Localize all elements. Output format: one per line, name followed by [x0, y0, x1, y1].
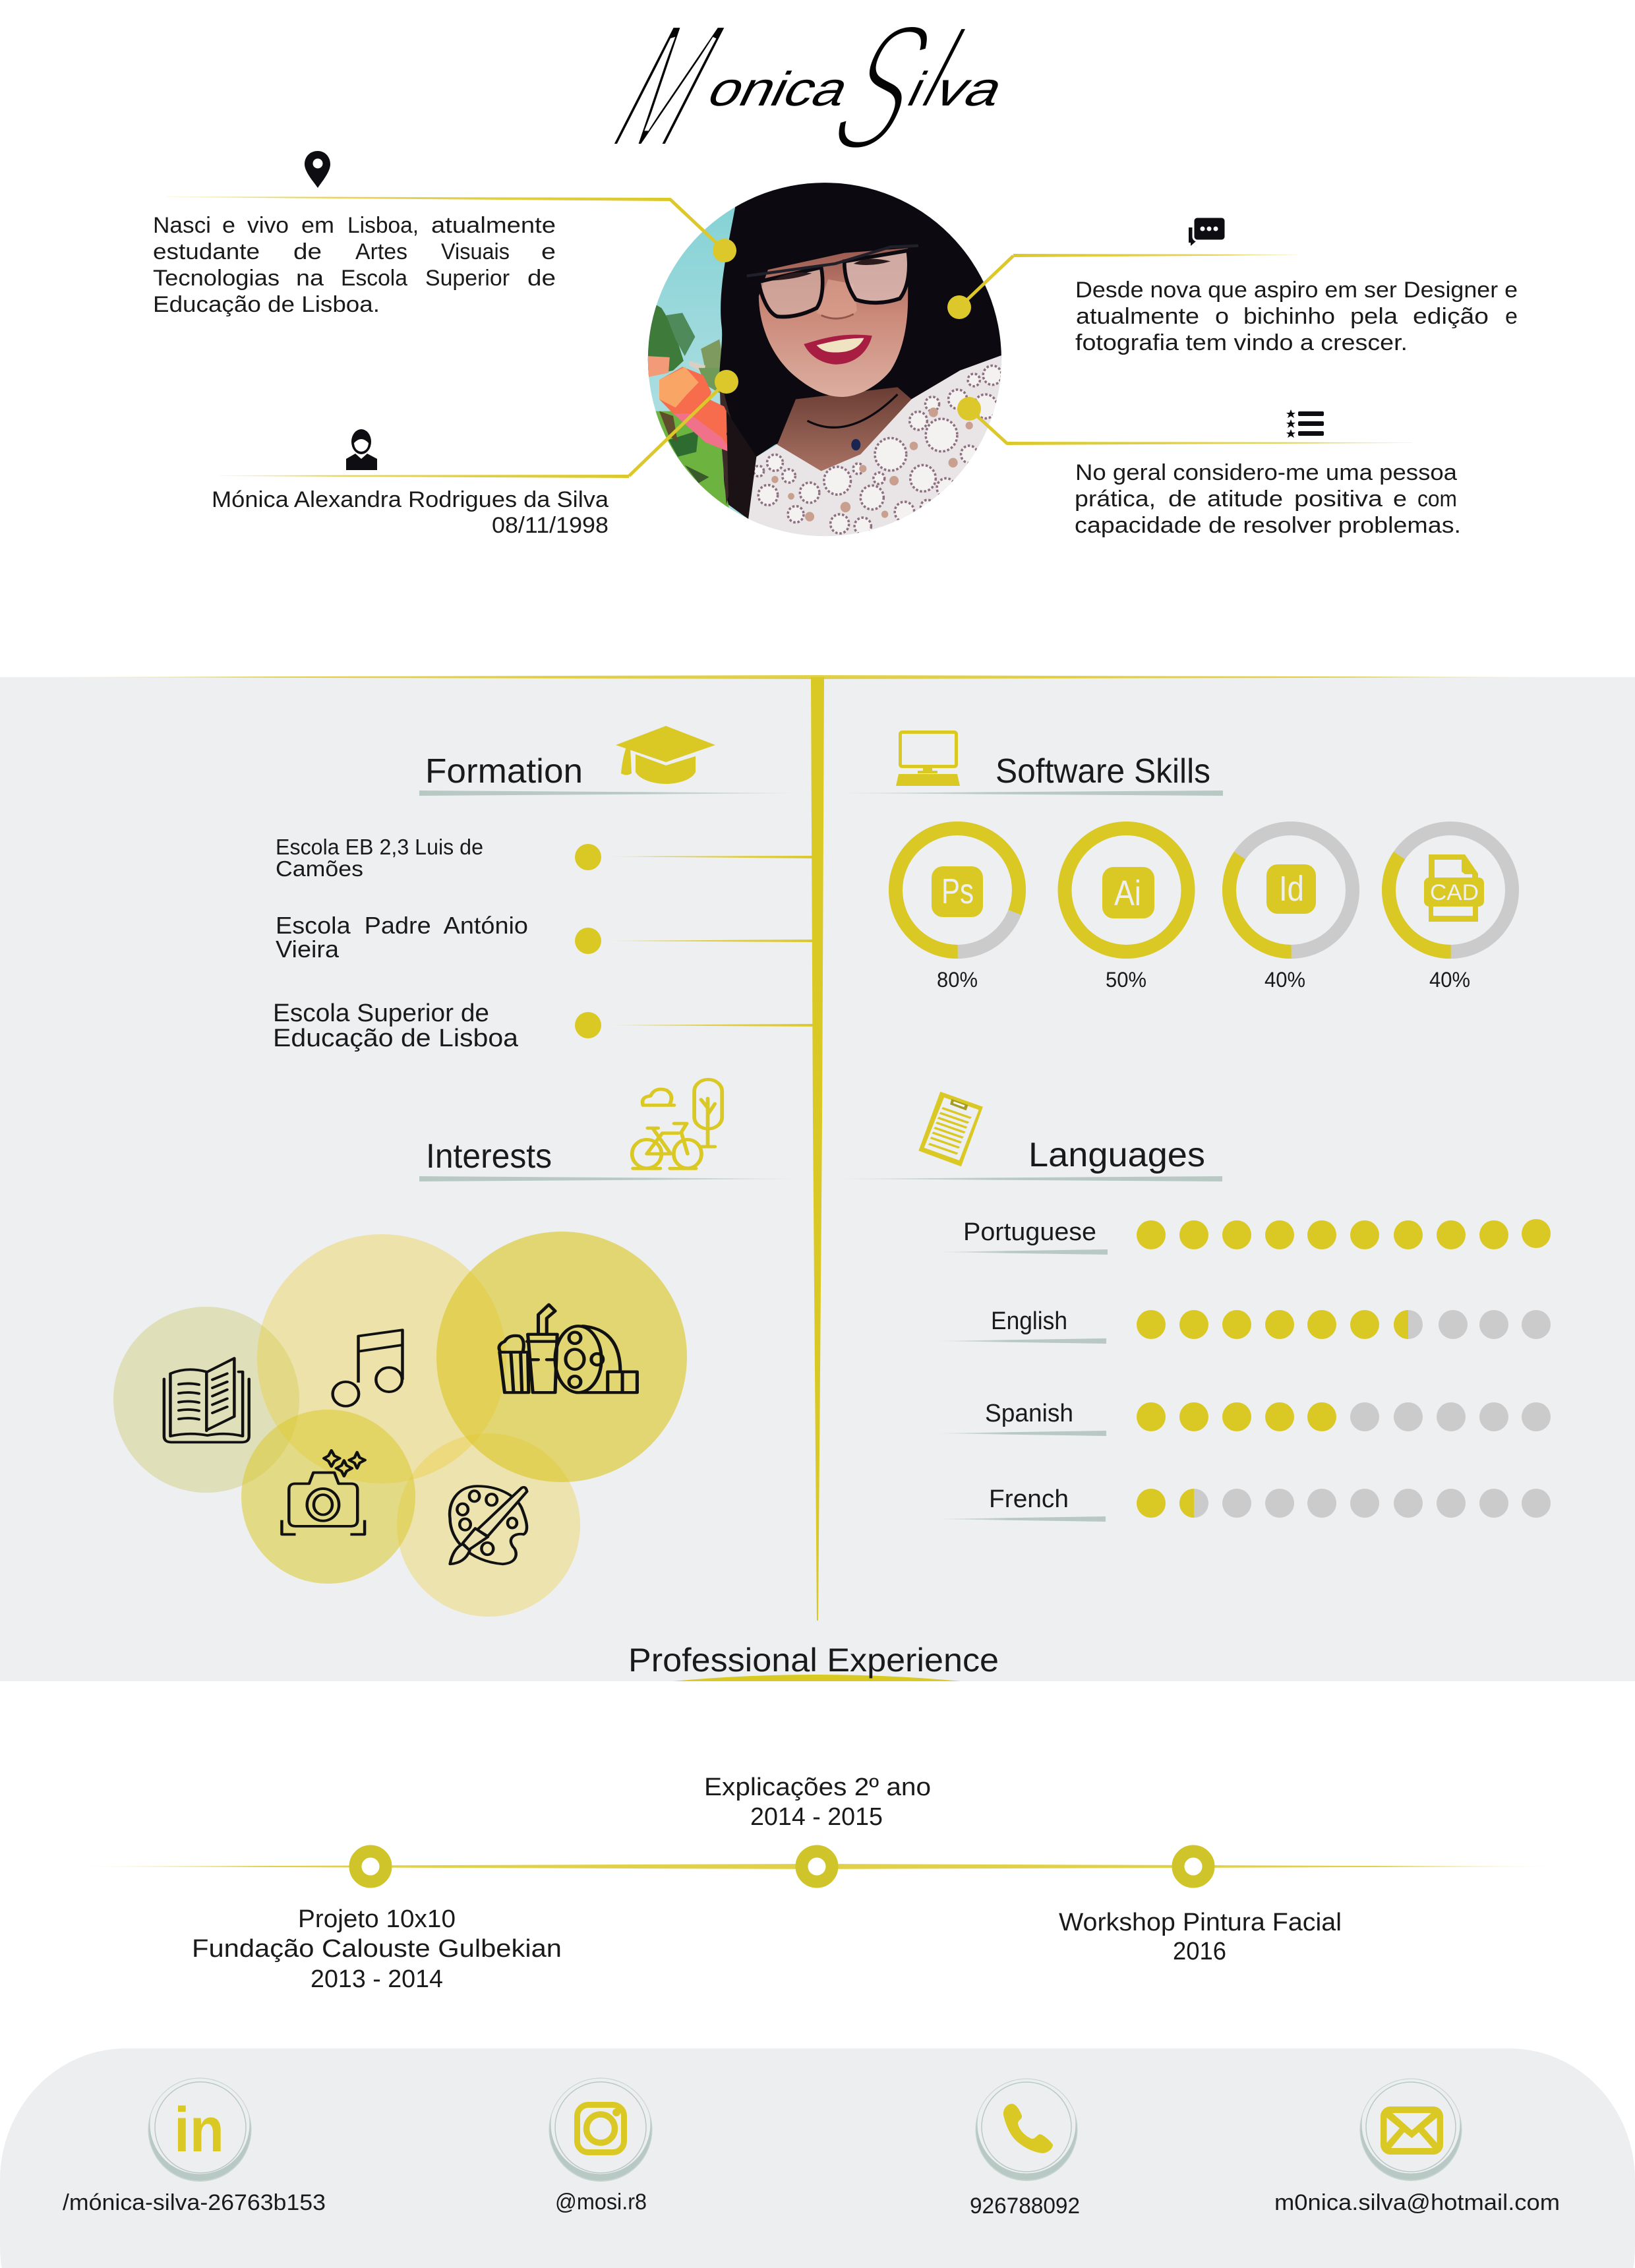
- contact: email: [1274, 2075, 1560, 2215]
- contact: phone: 926788092: [970, 2193, 1080, 2219]
- contact: LinkedIn: in: [174, 2095, 224, 2165]
- contact: phone: [970, 2075, 1080, 2219]
- title: [583, 0, 1014, 189]
- text: personality: capacidade de resolver problemas.: [1075, 513, 1461, 538]
- formation item 3: Educação de Lisboa: [273, 1025, 519, 1052]
- icon: clipboard document: [918, 1092, 983, 1166]
- text: about: e: [541, 239, 556, 264]
- connector: name line: [220, 370, 738, 478]
- title: l: [908, 10, 978, 128]
- text: about: Visuais: [441, 239, 510, 264]
- text: name and birth date: Mónica Alexandra Rodrigues da Silva: [212, 487, 609, 512]
- chart: Spanish rating: Spanish: [985, 1400, 1073, 1427]
- text: about: vivo: [247, 213, 289, 238]
- chart: CAD ring: 40%: [1429, 968, 1470, 992]
- text: aspirations: edição: [1413, 304, 1489, 329]
- formation item 1: [276, 835, 813, 881]
- connector: about line: [167, 196, 736, 262]
- text: personality: [1075, 460, 1461, 538]
- heading: Interests: [419, 1137, 798, 1181]
- chart: Illustrator ring: [1065, 828, 1188, 992]
- icon: list: [1286, 409, 1324, 438]
- timeline marker 2: [802, 1851, 832, 1882]
- icon: palette: [450, 1486, 527, 1564]
- connector: personality line: [957, 397, 1412, 445]
- timeline marker 1: [355, 1851, 386, 1882]
- list: formation: [273, 835, 813, 1052]
- text: Projeto 10x10: Fundação Calouste Gulbekian: [192, 1935, 562, 1963]
- chart: Portuguese rating: [938, 1218, 1551, 1255]
- text: Projeto 10x10: 2013 - 2014: [311, 1965, 443, 1993]
- connector: dream line: [947, 254, 1297, 319]
- icon: graduation cap: [616, 726, 715, 784]
- text: about: na: [296, 266, 324, 291]
- heading: Software Skills: Software Skills: [996, 752, 1210, 791]
- heading: Software Skills: [831, 752, 1223, 796]
- heading: Formation: Formation: [425, 752, 583, 791]
- heading: Interests: Interests: [426, 1137, 552, 1176]
- icon: speech bubbles: [1189, 217, 1226, 246]
- heading: Professional Experience: Professional Experience: [628, 1642, 999, 1679]
- formation item 3: Escola Superior de: [273, 1000, 489, 1027]
- text: aspirations: o: [1215, 304, 1229, 329]
- timeline marker 3: [1178, 1851, 1208, 1882]
- text: Projeto 10x10: [192, 1905, 562, 1993]
- formation item 3: [273, 1000, 813, 1052]
- chart: French rating: French: [989, 1485, 1069, 1513]
- text: Explicações: [704, 1774, 931, 1831]
- divider: vertical gold bar: [811, 677, 824, 1621]
- contact: Instagram: @mosi.r8: [555, 2190, 647, 2215]
- text: personality: de: [1168, 487, 1197, 512]
- chart: Photoshop ring: 80%: [937, 968, 978, 992]
- icon: camera: [282, 1450, 365, 1534]
- text: personality: e: [1393, 487, 1407, 512]
- title: va: [926, 62, 1014, 116]
- chart: InDesign ring: 40%: [1264, 968, 1305, 992]
- icon: location pin: [305, 151, 330, 188]
- chart: English rating: [937, 1307, 1551, 1344]
- text: Workshop: Workshop Pintura Facial: [1059, 1909, 1342, 1936]
- text: about: e: [222, 213, 235, 238]
- heading: Formation: [419, 752, 798, 796]
- contact: Instagram: [549, 2074, 652, 2215]
- chart: Portuguese rating: Portuguese: [963, 1218, 1096, 1246]
- bubble: photography: [241, 1410, 415, 1584]
- bubble: painting: [397, 1433, 580, 1617]
- icon: bicycle and tree: [632, 1079, 722, 1168]
- formation item 2: Escola Padre António: [276, 912, 528, 939]
- chart: Illustrator ring: 50%: [1106, 968, 1146, 992]
- chart: Illustrator ring: Ai: [1114, 874, 1141, 913]
- text: about: atualmente: [431, 213, 556, 238]
- text: aspirations: e: [1505, 304, 1518, 329]
- text: aspirations: [1075, 278, 1518, 355]
- text: Workshop: [1059, 1909, 1342, 1965]
- text: Explicações: Explicações 2º ano: [704, 1774, 931, 1801]
- text: aspirations: bichinho: [1243, 304, 1335, 329]
- text: name and birth date: 08/11/1998: [492, 513, 609, 538]
- text: aspirations: pela: [1350, 304, 1398, 329]
- contact: email: m0nica.silva@hotmail.com: [1274, 2190, 1560, 2215]
- text: about: Superior: [425, 266, 510, 291]
- formation item 1: Camões: [276, 856, 363, 881]
- formation item 2: Vieira: [276, 936, 340, 963]
- text: personality: No geral considero-me uma pessoa: [1075, 460, 1457, 485]
- icon: music note: [333, 1330, 402, 1406]
- text: Projeto 10x10: Projeto 10x10: [298, 1905, 456, 1933]
- chart: InDesign ring: [1229, 828, 1353, 992]
- text: Workshop: 2016: [1173, 1938, 1226, 1965]
- text: name and birth date: [212, 487, 609, 538]
- text: personality: prática,: [1075, 487, 1156, 512]
- text: personality: com: [1417, 487, 1457, 512]
- bubble: music: [257, 1234, 506, 1483]
- icon: book: [164, 1358, 249, 1442]
- panel: skills background: [0, 677, 1635, 1681]
- chart: CAD ring: [1388, 828, 1512, 992]
- icon: person: [346, 429, 377, 470]
- icon: monitor: [896, 732, 960, 786]
- text: personality: positiva: [1294, 487, 1382, 512]
- chart: CAD ring: CAD: [1430, 880, 1479, 905]
- heading: Languages: [831, 1136, 1222, 1181]
- chart: English rating: English: [991, 1307, 1067, 1335]
- text: about: de: [527, 266, 556, 291]
- divider: top gold line: [59, 675, 1549, 679]
- icon: cinema: [499, 1305, 637, 1392]
- title: i: [899, 62, 936, 116]
- text: aspirations: atualmente: [1076, 304, 1199, 329]
- text: about: Escola: [341, 266, 407, 291]
- formation item 2: [276, 912, 813, 963]
- contact: LinkedIn: [63, 2074, 326, 2215]
- text: about: estudante: [153, 239, 260, 264]
- text: about: Educação de Lisboa.: [153, 292, 380, 317]
- chart: InDesign ring: Id: [1279, 869, 1304, 909]
- text: aspirations: Desde nova que aspiro em ser Designer e: [1075, 278, 1518, 303]
- chart: Photoshop ring: Ps: [941, 872, 974, 911]
- bubble: cinema: [436, 1232, 687, 1482]
- photo portrait: [647, 183, 1001, 537]
- title: onica: [699, 62, 860, 116]
- text: about: Artes: [355, 239, 407, 264]
- bubble: reading: [113, 1307, 299, 1493]
- heading: Languages: Languages: [1028, 1136, 1205, 1174]
- timeline: [80, 1851, 1553, 1882]
- text: personality: atitude: [1207, 487, 1283, 512]
- chart: Photoshop ring: [895, 828, 1019, 992]
- contact: LinkedIn: /mónica-silva-26763b153: [63, 2190, 326, 2215]
- text: about: Nasci: [153, 213, 211, 238]
- chart: interest bubbles: [113, 1232, 687, 1617]
- text: about: em: [301, 213, 334, 238]
- panel: contacts: [0, 2048, 1635, 2268]
- text: aspirations: fotografia tem vindo a crescer.: [1075, 330, 1408, 355]
- chart: Spanish rating: [937, 1400, 1551, 1436]
- formation item 1: Escola EB 2,3 Luis de: [276, 835, 483, 859]
- text: about: Tecnologias: [153, 266, 280, 291]
- chart: French rating: [937, 1485, 1551, 1522]
- text: Explicações: 2014 - 2015: [750, 1803, 883, 1831]
- text: about: [153, 213, 556, 317]
- text: about: Lisboa,: [347, 213, 419, 238]
- text: about: de: [293, 239, 322, 264]
